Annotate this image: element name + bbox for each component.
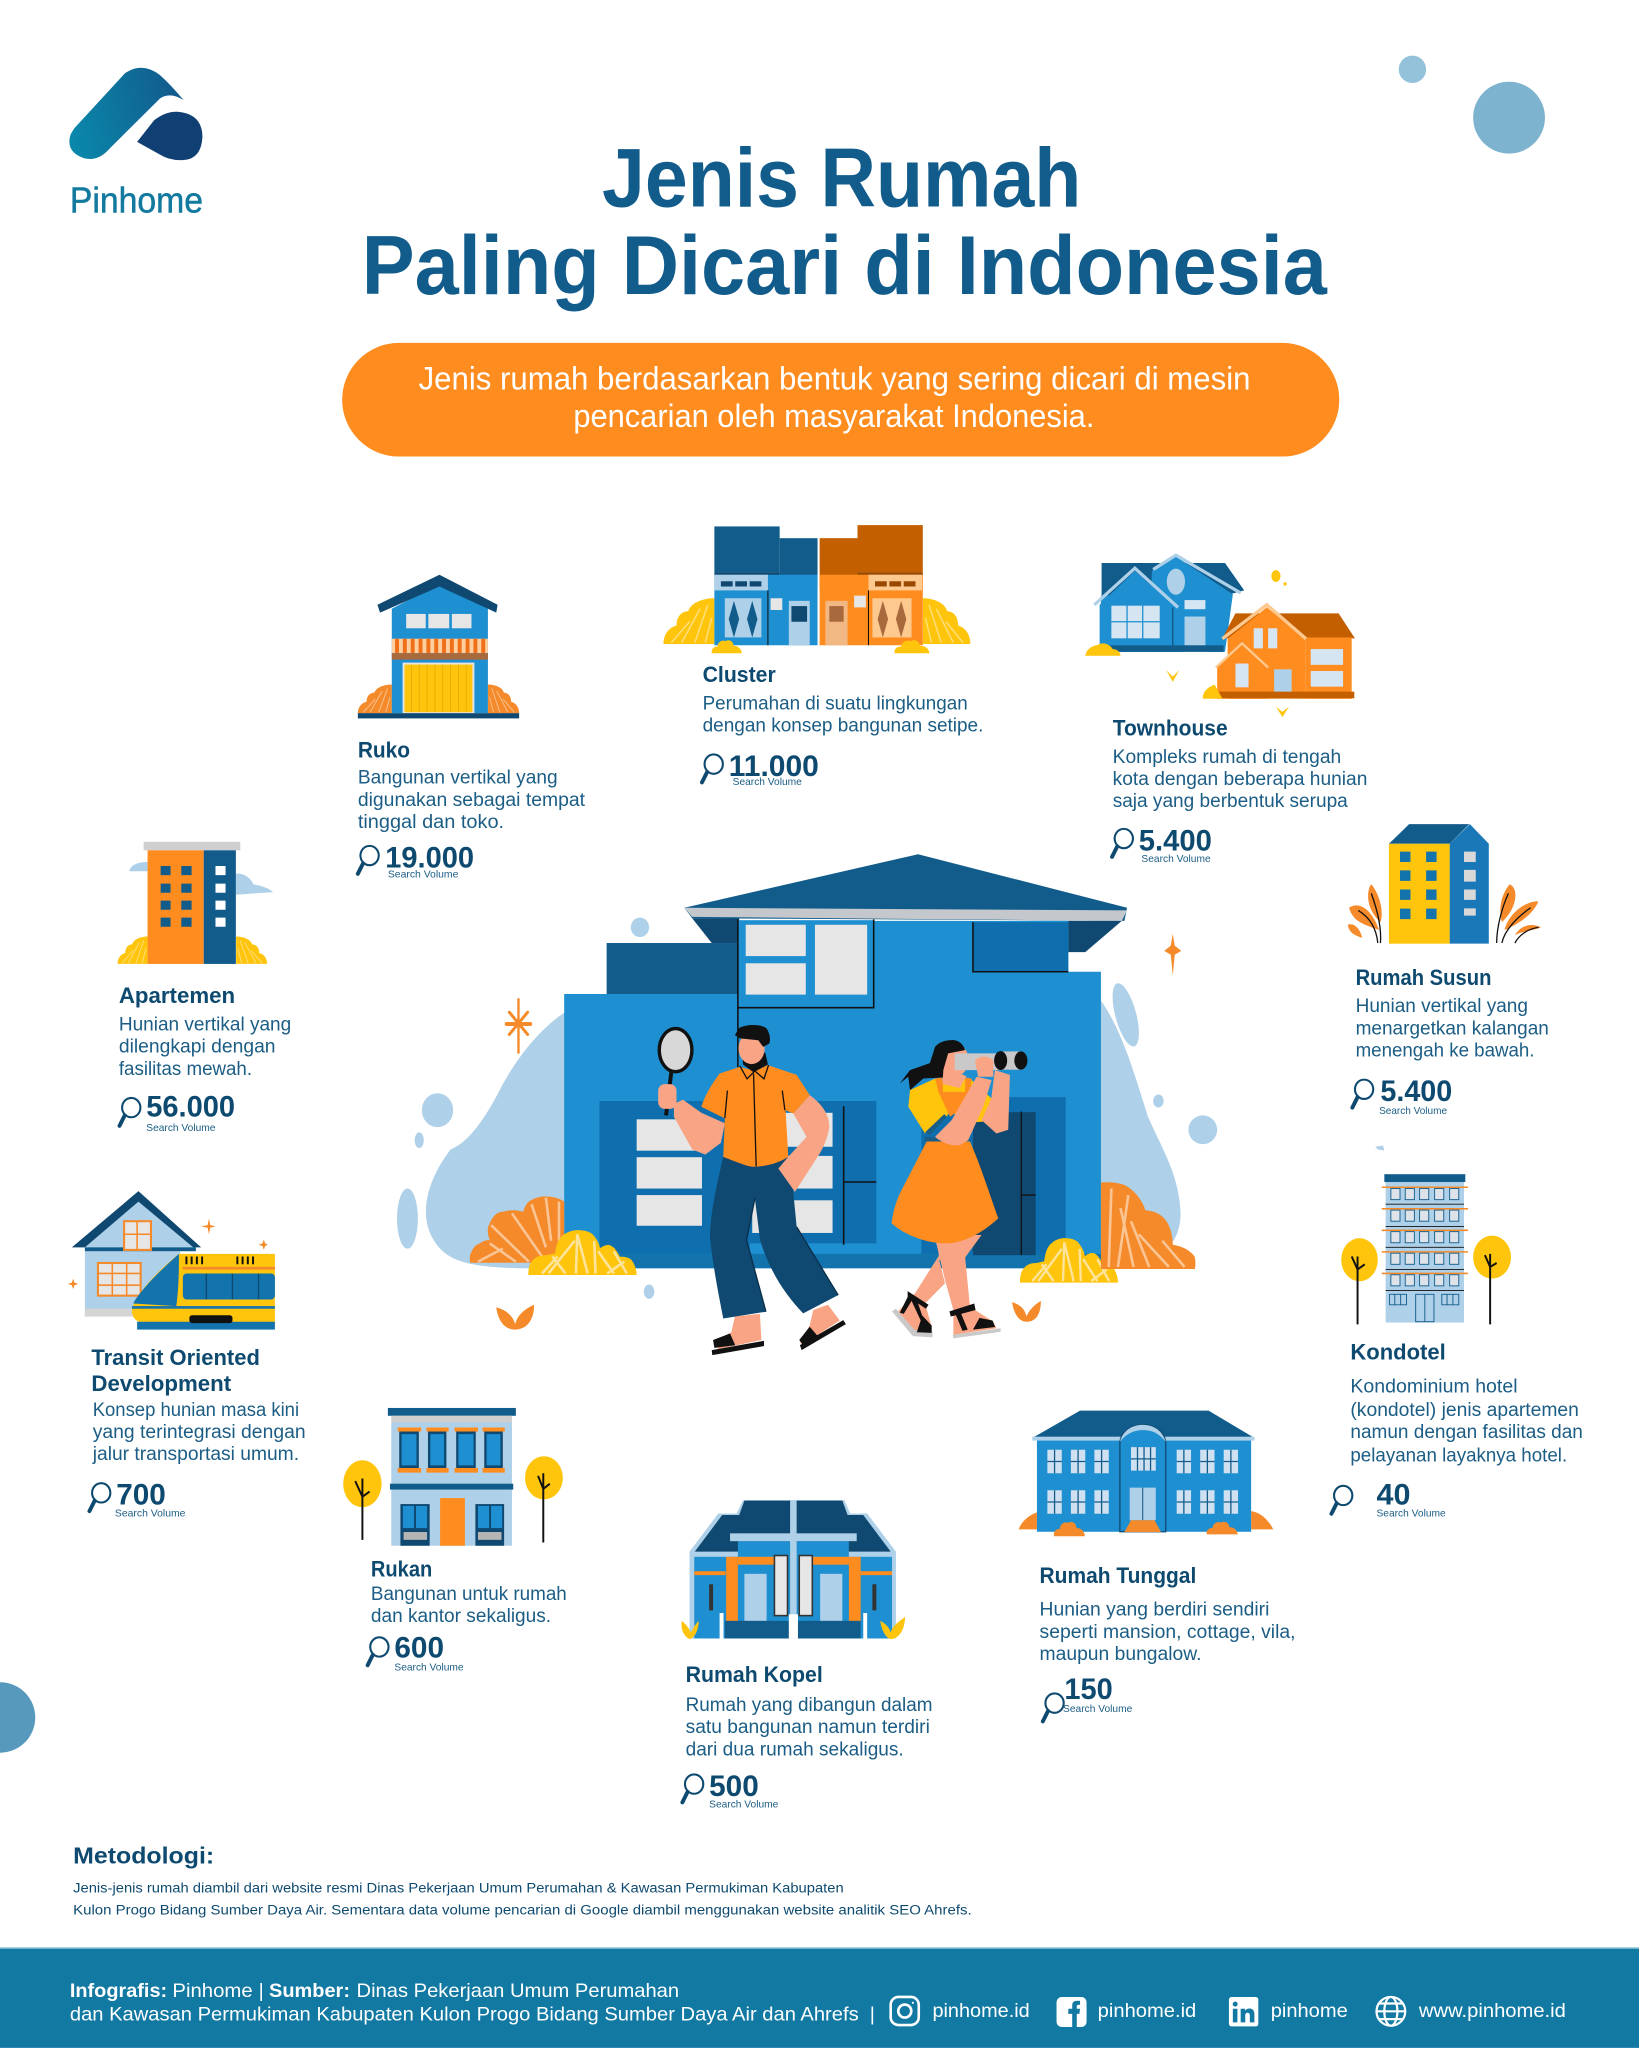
- description: [1113, 747, 1367, 812]
- panel: Apartemen: [118, 842, 291, 1134]
- title: Paling Dicari di Indonesia: [362, 218, 1328, 312]
- source credit: dan Kawasan Permukiman Kabupaten Kulon Progo Bidang Sumber Daya Air dan Ahrefs: [70, 2003, 859, 2025]
- heading: Apartemen: [119, 983, 235, 1008]
- description: fasilitas mewah.: [119, 1059, 252, 1080]
- description: Perumahan di suatu lingkungan: [703, 693, 968, 714]
- icon: hotel tower: [1341, 1145, 1511, 1324]
- description: [92, 1400, 306, 1465]
- description: [119, 1015, 291, 1080]
- search volume: 500: [709, 1770, 759, 1803]
- description: maupun bungalow.: [1040, 1644, 1201, 1665]
- description: [1040, 1600, 1296, 1665]
- panel: Rumah Susun: [1348, 824, 1549, 1117]
- search volume: [368, 1631, 464, 1673]
- description: yang terintegrasi dengan: [93, 1422, 306, 1443]
- search volume: [119, 1091, 235, 1134]
- search volume: 19.000: [385, 841, 474, 874]
- description: Konsep hunian masa kini: [93, 1400, 299, 1421]
- description: dari dua rumah sekaligus.: [686, 1739, 904, 1760]
- search volume: [702, 750, 819, 788]
- icon: ruko building: [358, 575, 519, 718]
- source credit: Dinas Pekerjaan Umum Perumahan: [357, 1980, 679, 2002]
- person: woman with binoculars: [892, 1040, 1027, 1338]
- panel: Kondotel: [1331, 1145, 1583, 1519]
- search volume: Search Volume: [1379, 1106, 1447, 1117]
- subtitle pill: [342, 343, 1339, 457]
- heading: Development: [91, 1371, 232, 1396]
- panel: Cluster: [663, 525, 983, 788]
- heading: [91, 1345, 260, 1396]
- panel: Rukan: [343, 1408, 567, 1673]
- description: Hunian vertikal yang: [119, 1015, 291, 1036]
- heading: Cluster: [703, 662, 776, 687]
- icon: shop-office building: [343, 1408, 563, 1546]
- methodology: Jenis-jenis rumah diambil dari website resmi Dinas Pekerjaan Umum Perumahan & Kawasan Permukiman Kabupaten: [73, 1880, 844, 1895]
- icon: instagram: [891, 1997, 919, 2025]
- heading: Rumah Susun: [1356, 965, 1491, 990]
- search volume: Search Volume: [709, 1800, 778, 1811]
- website: www.pinhome.id: [1418, 2000, 1566, 2022]
- source credit: |: [870, 2003, 875, 2025]
- description: digunakan sebagai tempat: [358, 790, 586, 811]
- decorative circle: large: [1473, 82, 1545, 154]
- leaf: left: [496, 1305, 534, 1330]
- linkedin handle: pinhome: [1271, 2000, 1348, 2022]
- source credit: Pinhome: [172, 1980, 253, 2002]
- panel: Rumah Kopel: [681, 1500, 932, 1811]
- description: (kondotel) jenis apartemen: [1350, 1400, 1579, 1421]
- search volume: 5.400: [1139, 824, 1212, 857]
- heading: Rumah Tunggal: [1040, 1563, 1196, 1588]
- methodology: Metodologi:: [73, 1843, 214, 1869]
- icon: flats building: [1348, 824, 1541, 944]
- search volume: Search Volume: [1376, 1508, 1446, 1519]
- description: tinggal dan toko.: [358, 812, 504, 833]
- search volume: Search Volume: [115, 1508, 185, 1519]
- central illustration: couple searching in front of a house: [397, 854, 1222, 1355]
- description: dengan konsep bangunan setipe.: [703, 715, 983, 736]
- panel: Transit Oriented Development: [68, 1191, 306, 1519]
- icon: house and train: [68, 1191, 275, 1330]
- search volume: 5.400: [1380, 1075, 1452, 1108]
- decorative circle: small: [1399, 56, 1426, 83]
- description: Kompleks rumah di tengah: [1113, 747, 1341, 768]
- heading: Rukan: [371, 1556, 432, 1581]
- sparkle: asterisk: [507, 999, 530, 1053]
- source credit: |: [259, 1980, 264, 2002]
- panel: Townhouse: [1085, 555, 1367, 865]
- description: seperti mansion, cottage, vila,: [1040, 1622, 1296, 1643]
- description: [703, 693, 983, 736]
- bush: right yellow: [1020, 1238, 1118, 1283]
- search volume: [1352, 1075, 1452, 1117]
- icon: semi-detached houses: [681, 1500, 905, 1639]
- description: Hunian yang berdiri sendiri: [1040, 1600, 1269, 1621]
- search volume: [1043, 1673, 1132, 1721]
- search volume: 700: [116, 1479, 166, 1512]
- search volume: Search Volume: [394, 1662, 464, 1673]
- subtitle pill: Jenis rumah berdasarkan bentuk yang sering dicari di mesin: [419, 359, 1250, 396]
- description: pelayanan layaknya hotel.: [1350, 1446, 1567, 1467]
- description: [1350, 1376, 1583, 1467]
- search volume: Search Volume: [1063, 1704, 1132, 1715]
- icon: apartment tower: [118, 842, 273, 964]
- search volume: [1112, 824, 1212, 865]
- subtitle pill: pencarian oleh masyarakat Indonesia.: [573, 397, 1094, 434]
- title: Jenis Rumah: [602, 130, 1081, 224]
- description: [358, 768, 586, 833]
- footer band: [0, 1947, 1639, 2048]
- instagram handle: pinhome.id: [932, 2000, 1030, 2022]
- title: [362, 130, 1328, 312]
- icon: cluster houses: [663, 525, 970, 653]
- icon: facebook: [1057, 1997, 1087, 2027]
- methodology: Kulon Progo Bidang Sumber Daya Air. Sementara data volume pencarian di Google diambil menggunakan website analitik SEO Ahrefs.: [73, 1903, 972, 1918]
- search volume: 600: [394, 1631, 444, 1664]
- search volume: 11.000: [729, 750, 819, 783]
- source credit: Sumber:: [269, 1980, 350, 2002]
- search volume: [89, 1479, 185, 1519]
- description: dilengkapi dengan: [119, 1037, 276, 1058]
- sparkle: cross: [1164, 934, 1181, 976]
- description: Bangunan untuk rumah: [371, 1584, 567, 1605]
- search volume: [1331, 1479, 1446, 1519]
- decorative circle: left edge: [0, 1682, 35, 1753]
- search volume: 56.000: [146, 1091, 235, 1124]
- heading: Ruko: [358, 738, 410, 763]
- description: dan kantor sekaligus.: [371, 1606, 551, 1627]
- methodology: [73, 1843, 972, 1918]
- icon: globe: [1376, 1997, 1405, 2026]
- leaf: right: [1012, 1301, 1041, 1322]
- search volume: 150: [1064, 1673, 1113, 1706]
- bush: right orange: [1101, 1182, 1195, 1269]
- description: Rumah yang dibangun dalam: [686, 1695, 932, 1716]
- logo: Pinhome: Pinhome: [70, 179, 203, 220]
- description: satu bangunan namun terdiri: [686, 1717, 930, 1738]
- description: [686, 1695, 932, 1760]
- description: Bangunan vertikal yang: [358, 768, 558, 789]
- search volume: Search Volume: [1141, 854, 1211, 865]
- description: Kondominium hotel: [1350, 1376, 1518, 1397]
- heading: Rumah Kopel: [686, 1662, 823, 1687]
- panel: Ruko: [358, 575, 586, 881]
- person: man with magnifier: [658, 1025, 846, 1355]
- search volume: [682, 1770, 778, 1811]
- source credit: Infografis:: [70, 1980, 167, 2002]
- search volume: Search Volume: [733, 777, 802, 788]
- description: kota dengan beberapa hunian: [1113, 769, 1367, 790]
- bush: left yellow: [528, 1230, 637, 1275]
- description: namun dengan fasilitas dan: [1350, 1422, 1583, 1443]
- description: [371, 1584, 567, 1627]
- description: Hunian vertikal yang: [1356, 996, 1528, 1017]
- description: jalur transportasi umum.: [92, 1444, 299, 1465]
- panel: Rumah Tunggal: [1019, 1411, 1296, 1721]
- icon: townhouses: [1085, 555, 1355, 717]
- logo: Pinhome: [69, 68, 203, 220]
- icon: detached house: [1019, 1411, 1273, 1536]
- heading: Transit Oriented: [91, 1345, 260, 1370]
- search volume: [358, 841, 474, 881]
- heading: Townhouse: [1113, 715, 1228, 740]
- description: [1356, 996, 1549, 1062]
- search volume: 40: [1376, 1479, 1410, 1512]
- description: menengah ke bawah.: [1356, 1041, 1535, 1062]
- description: menargetkan kalangan: [1356, 1018, 1549, 1039]
- facebook handle: pinhome.id: [1098, 2000, 1196, 2022]
- icon: linkedin: [1229, 1997, 1258, 2026]
- search volume: Search Volume: [146, 1123, 215, 1134]
- source credit: [70, 1980, 875, 2025]
- search volume: Search Volume: [388, 870, 458, 881]
- bush: left orange: [470, 1196, 564, 1263]
- description: saja yang berbentuk serupa: [1113, 791, 1348, 812]
- heading: Kondotel: [1350, 1340, 1446, 1365]
